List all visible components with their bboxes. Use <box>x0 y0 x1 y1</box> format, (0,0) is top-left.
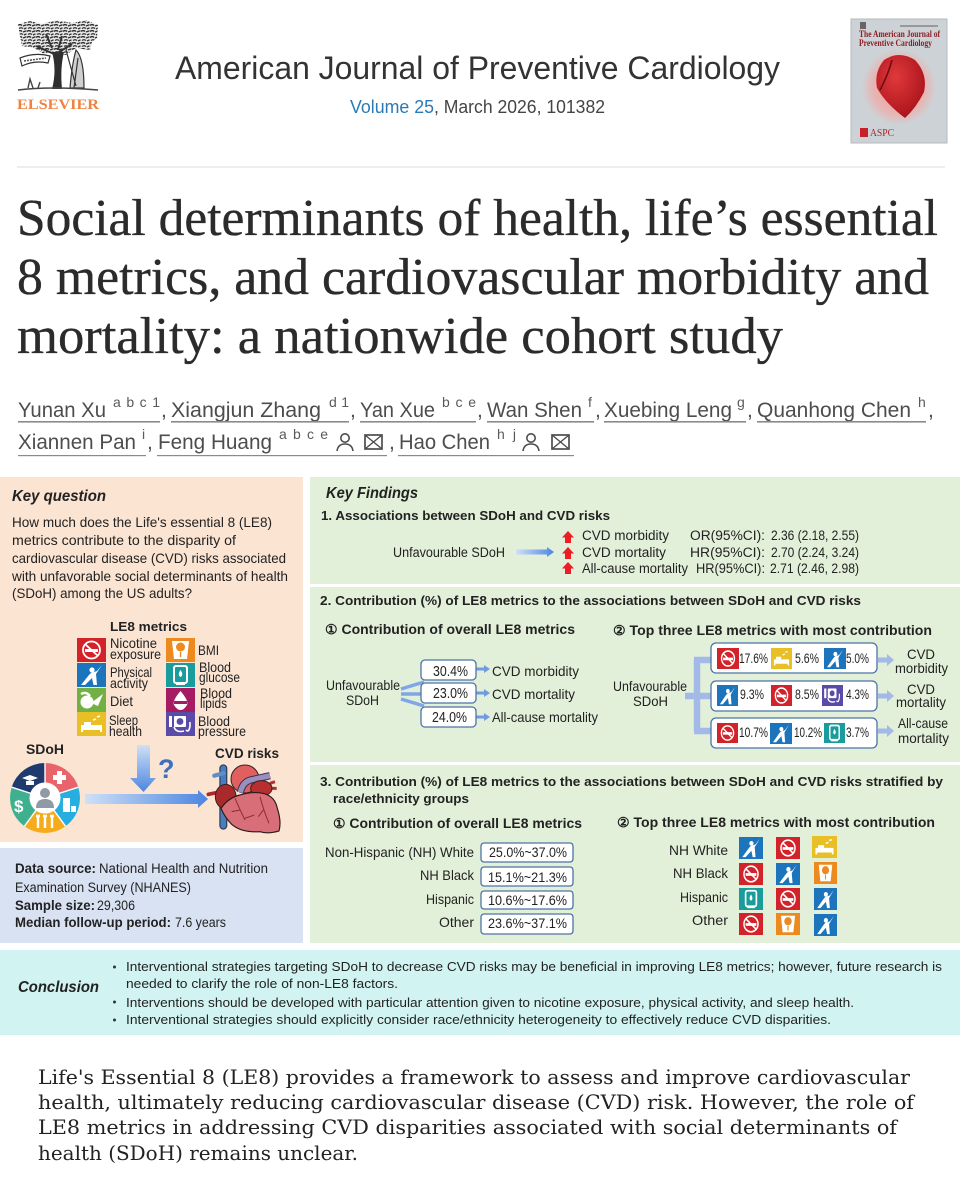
question text: How much does the Life's essential 8 (LE8) <box>12 514 272 530</box>
article title: 8 metrics, and cardiovascular morbidity and <box>17 249 929 306</box>
authors: b c e <box>442 394 476 410</box>
authors: , <box>595 399 601 422</box>
caption paragraph: health, ultimately reducing cardiovascular disease (CVD) risk. However, the role of <box>38 1091 916 1114</box>
legend: LE8 metrics: Sleep <box>109 712 138 728</box>
caption paragraph: health (SDoH) remains unclear. <box>38 1142 358 1165</box>
association results: All-cause mortality <box>582 561 688 576</box>
authors: Hao Chen <box>399 431 490 454</box>
row: CVD mortality top three: 8.5% <box>795 686 819 702</box>
legend: LE8 metrics: Physical <box>110 664 152 680</box>
race/ethnicity contribution ranges: 25.0%~37.0% <box>489 844 567 860</box>
authors: g <box>737 394 745 410</box>
authors: a b c e <box>279 426 328 442</box>
question text: (SDoH) among the US adults? <box>12 585 192 601</box>
subheading: overall contribution: ① Contribution of overall LE8 metrics <box>333 816 582 831</box>
conclusion bullets: Interventional strategies targeting SDoH to decrease CVD risks may be beneficial in improving LE8 metrics; however, future research is <box>126 959 943 974</box>
row: CVD mortality top three <box>711 681 877 711</box>
association results: OR(95%CI): <box>690 528 765 543</box>
authors: , <box>389 431 395 454</box>
heading: conclusion: Conclusion <box>18 979 99 996</box>
legend: LE8 metrics: lipids <box>200 695 227 711</box>
overall contribution rows: CVD morbidity <box>492 663 579 679</box>
question mark: ? <box>158 754 174 784</box>
conclusion bullets: Interventions should be developed with particular attention given to nicotine exposure, physical activity, and sleep health. <box>126 995 854 1010</box>
association results: CVD mortality <box>582 545 666 560</box>
question text: metrics contribute to the disparity of <box>12 532 236 548</box>
label: CVD risks: CVD risks <box>215 746 279 761</box>
authors: , <box>747 399 753 422</box>
panel: section 2 contribution of LE8 metrics <box>310 587 960 762</box>
panel: data source: 7.6 years <box>175 915 226 930</box>
heading: section 2: 2. Contribution (%) of LE8 metrics to the associations between SDoH and CVD risks <box>320 593 861 608</box>
heading: section 3 <box>320 774 944 806</box>
row: CVD mortality top three: 9.3% <box>740 686 764 702</box>
race/ethnicity contribution ranges: Other <box>439 914 474 930</box>
association results <box>582 528 859 576</box>
race/ethnicity contribution ranges: Hispanic <box>426 891 474 907</box>
red up arrows <box>562 531 574 574</box>
journal name: American Journal of Preventive Cardiology <box>175 50 780 86</box>
labels: outcomes: CVD <box>907 646 935 662</box>
article title <box>17 190 938 365</box>
connectors: SDoH to overall values <box>401 682 424 706</box>
association results: HR(95%CI): <box>696 561 765 576</box>
panel: conclusion <box>0 950 960 1035</box>
heading: key question: Key question <box>12 488 106 505</box>
arrow: LE8 mediation (down) <box>130 745 156 792</box>
authors: , <box>350 399 356 422</box>
journal cover thumbnail: Preventive Cardiology <box>859 38 932 48</box>
heading: section 1: 1. Associations between SDoH and CVD risks <box>321 508 610 523</box>
association results: HR(95%CI): <box>690 545 765 560</box>
question text: cardiovascular disease (CVD) risks associated <box>12 550 286 566</box>
legend: LE8 metrics: Nicotine <box>110 635 157 651</box>
panel: data source: Sample size: <box>15 898 95 913</box>
overall contribution rows: 23.0% <box>433 686 468 702</box>
authors: h <box>918 394 926 410</box>
authors: , <box>147 431 153 454</box>
label: unfavourable SDoH: SDoH <box>346 692 379 708</box>
journal cover thumbnail <box>851 19 947 143</box>
panel: data source: Data source: <box>15 861 96 876</box>
panel: key question <box>0 477 303 842</box>
labels: outcomes: CVD <box>907 681 935 697</box>
race/ethnicity contribution ranges: NH Black <box>420 867 475 883</box>
authors: a b c 1 <box>113 394 160 410</box>
labels: outcomes: mortality <box>896 694 946 710</box>
race/ethnicity contribution ranges <box>325 843 573 934</box>
authors: Wan Shen <box>487 399 582 422</box>
race/ethnicity contribution ranges: 10.6%~17.6% <box>488 892 567 908</box>
legend: LE8 metrics <box>77 619 246 739</box>
header divider <box>17 166 945 168</box>
association results: CVD morbidity <box>582 528 669 543</box>
label: SDoH: SDoH <box>26 742 64 757</box>
heading: key findings: Key Findings <box>326 485 418 502</box>
legend: LE8 metrics: Blood <box>200 685 232 701</box>
panel: key findings, section 1 <box>310 477 960 584</box>
legend: LE8 metrics: Blood <box>198 713 230 729</box>
subheading: top three: ② Top three LE8 metrics with most contribution <box>617 815 935 830</box>
connector: SDoH to top-three rows <box>685 660 712 731</box>
authors: Yan Xue <box>360 399 435 422</box>
caption paragraph <box>38 1066 916 1165</box>
publisher logo: Elsevier <box>17 20 99 113</box>
conclusion bullets: Interventional strategies should explicitly consider race/ethnicity heterogeneity to effectively reduce CVD disparities. <box>126 1012 831 1027</box>
panel: data source: Median follow-up period: <box>15 915 171 930</box>
authors: d 1 <box>329 394 349 410</box>
arrow: SDoH to outcomes <box>516 547 554 557</box>
legend: LE8 metrics: LE8 metrics <box>110 619 187 634</box>
association results: 2.36 (2.18, 2.55) <box>771 528 859 543</box>
label: unfavourable SDoH (right) <box>613 678 687 709</box>
authors: i <box>142 426 145 442</box>
icon: heart <box>208 765 280 833</box>
authors: , <box>477 399 483 422</box>
race/ethnicity top three icons: Other <box>692 912 728 928</box>
panel: data source: 29,306 <box>97 898 135 913</box>
caption paragraph: LE8 metrics in addressing CVD disparities associated with social determinants of <box>38 1116 899 1139</box>
association results: 2.70 (2.24, 3.24) <box>771 545 859 560</box>
conclusion bullets <box>113 959 943 1027</box>
article title: mortality: a nationwide cohort study <box>17 308 783 365</box>
authors: Xiangjun Zhang <box>171 399 321 422</box>
panel: data source <box>0 848 303 943</box>
authors: , <box>928 399 934 422</box>
legend: LE8 metrics: BMI <box>198 642 219 658</box>
heading: section 3: race/ethnicity groups <box>333 791 469 806</box>
labels: outcomes: All-cause <box>898 715 948 731</box>
race/ethnicity top three icons: NH White <box>669 842 728 858</box>
authors: Xuebing Leng <box>604 399 732 422</box>
row: CVD morbidity top three <box>711 643 877 673</box>
legend: LE8 metrics: glucose <box>199 669 240 685</box>
arrow: SDoH to CVD risks <box>85 790 208 808</box>
race/ethnicity contribution ranges: 23.6%~37.1% <box>488 915 567 931</box>
journal volume line: , March 2026, 101382 <box>434 97 605 117</box>
legend: LE8 metrics: pressure <box>198 723 246 739</box>
race/ethnicity top three icons: NH Black <box>673 865 729 881</box>
subheading: top three: ② Top three LE8 metrics with most contribution <box>613 623 932 638</box>
conclusion bullets: needed to clarify the role of non-LE8 factors. <box>126 976 398 991</box>
authors: Feng Huang <box>158 431 272 454</box>
arrows: rows to outcomes <box>878 654 894 737</box>
journal volume line <box>350 97 605 117</box>
race/ethnicity contribution ranges: Non-Hispanic (NH) White <box>325 844 474 860</box>
caption paragraph: Life's Essential 8 (LE8) provides a framework to assess and improve cardiovascular <box>38 1066 911 1089</box>
overall contribution rows: All-cause mortality <box>492 709 598 725</box>
row: CVD morbidity top three: 17.6% <box>739 650 768 666</box>
overall contribution rows: CVD mortality <box>492 686 575 702</box>
panel: section 3 race/ethnicity <box>310 765 960 943</box>
row: CVD morbidity top three: 5.6% <box>795 650 819 666</box>
label: unfavourable SDoH <box>326 677 400 708</box>
panel: data source: Examination Survey (NHANES) <box>15 880 191 895</box>
authors: , <box>161 399 167 422</box>
journal volume line: Volume 25 <box>350 97 434 117</box>
row: all-cause mortality top three: 10.7% <box>739 724 768 740</box>
labels: outcomes: mortality <box>898 730 949 746</box>
overall contribution rows: 30.4% <box>433 664 468 680</box>
legend: LE8 metrics: Blood <box>199 659 231 675</box>
authors: Xiannen Pan <box>18 431 136 454</box>
row: all-cause mortality top three <box>711 718 877 748</box>
subheading: overall contribution: ① Contribution of overall LE8 metrics <box>325 622 575 637</box>
journal cover thumbnail: The American Journal of <box>859 29 941 39</box>
row: all-cause mortality top three: 10.2% <box>794 724 822 740</box>
race/ethnicity contribution ranges: 15.1%~21.3% <box>488 869 567 885</box>
row: all-cause mortality top three: 3.7% <box>846 724 869 740</box>
icon: SDoH wheel: $ <box>14 797 24 816</box>
label: unfavourable SDoH (right): Unfavourable <box>613 678 687 694</box>
question text: with unfavorable social determinants of health <box>11 568 288 584</box>
article title: Social determinants of health, life’s essential <box>17 190 938 247</box>
label: unfavourable SDoH: Unfavourable <box>326 677 400 693</box>
race/ethnicity top three icons <box>669 836 837 936</box>
row: CVD morbidity top three: 5.0% <box>846 650 869 666</box>
legend: LE8 metrics: activity <box>110 675 148 691</box>
panel: data source: National Health and Nutrition <box>99 861 268 876</box>
question text <box>11 514 288 601</box>
labels: outcomes <box>895 646 949 746</box>
label: unfavourable SDoH: Unfavourable SDoH <box>393 545 505 560</box>
legend: LE8 metrics: Diet <box>110 693 133 709</box>
authors: h j <box>497 426 516 442</box>
icon: SDoH wheel <box>10 763 80 833</box>
authors: f <box>588 394 592 410</box>
journal cover thumbnail: ASPC <box>870 128 894 139</box>
overall contribution rows <box>421 660 598 727</box>
association results: 2.71 (2.46, 2.98) <box>770 561 859 576</box>
race/ethnicity top three icons: Hispanic <box>680 889 728 905</box>
authors: Yunan Xu <box>18 399 106 422</box>
authors: Quanhong Chen <box>757 399 911 422</box>
row: CVD mortality top three: 4.3% <box>846 686 869 702</box>
heading: section 3: 3. Contribution (%) of LE8 metrics to the associations between SDoH and CVD risks stratified by <box>320 774 944 789</box>
publisher logo: Elsevier: ELSEVIER <box>17 97 99 113</box>
overall contribution rows: 24.0% <box>432 710 467 726</box>
authors <box>18 394 934 456</box>
legend: LE8 metrics: health <box>109 723 142 739</box>
labels: outcomes: morbidity <box>895 660 948 676</box>
label: unfavourable SDoH (right): SDoH <box>633 693 668 709</box>
legend: LE8 metrics: exposure <box>110 646 161 662</box>
